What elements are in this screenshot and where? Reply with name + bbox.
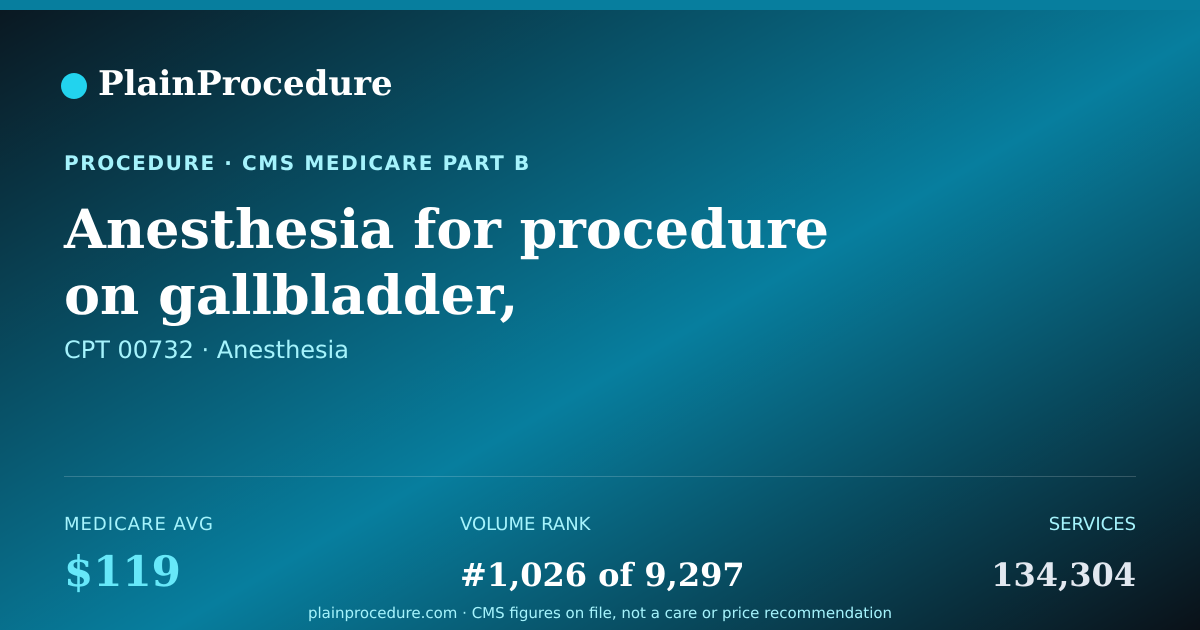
footer note: plainprocedure.com · CMS figures on file, not a care or price recommendation [308, 604, 892, 622]
divider [64, 476, 1136, 477]
stat label: SERVICES [1049, 514, 1136, 535]
stat: volume rank [460, 514, 745, 594]
stat: medicare average [64, 514, 214, 596]
stat label: VOLUME RANK [460, 514, 590, 535]
stat value: #1,026 of 9,297 [460, 556, 745, 594]
brand logo [61, 64, 393, 104]
title: on gallbladder, [64, 263, 518, 327]
stat label: MEDICARE AVG [64, 514, 214, 535]
title: Anesthesia for procedure [64, 197, 829, 261]
subtitle: CPT 00732 · Anesthesia [64, 336, 349, 364]
top accent bar [0, 0, 1200, 10]
eyebrow label: PROCEDURE · CMS MEDICARE PART B [64, 151, 531, 175]
stat: services [991, 514, 1136, 594]
icon: brand dot [61, 73, 87, 99]
stat value: 134,304 [991, 556, 1136, 594]
stat value: $119 [64, 547, 181, 596]
brand name: PlainProcedure [98, 64, 393, 104]
title [64, 197, 829, 327]
